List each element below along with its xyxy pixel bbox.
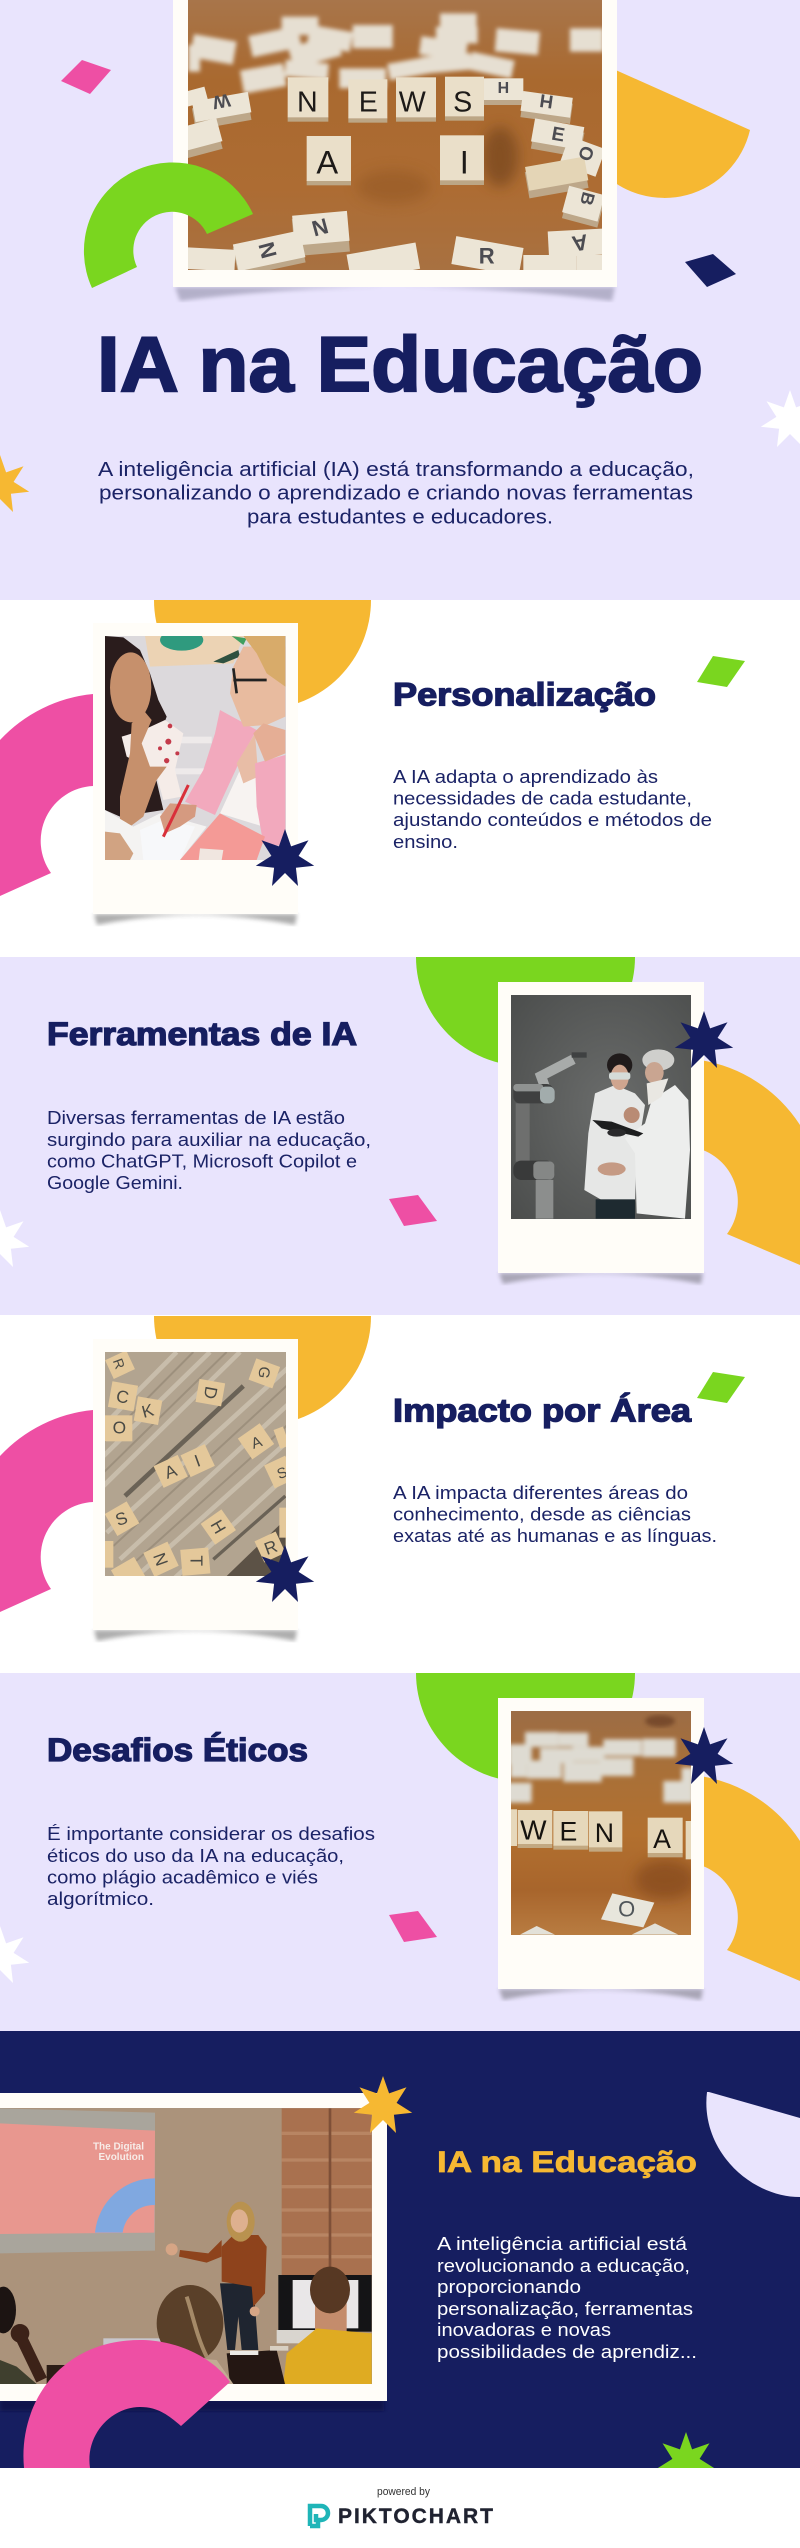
body text: Google Gemini.: [47, 1173, 183, 1193]
photo: scrabble tiles on wood: W: [520, 1814, 547, 1845]
photo: presenter in classroom: [0, 2108, 372, 2384]
photo: scrabble tiles spelling NEWS AI: N: [253, 239, 282, 261]
photo: scrabble tiles spelling NEWS AI: [177, 0, 606, 281]
body text: revolucionando a educação,: [437, 2256, 690, 2276]
body text: A inteligência artificial está: [437, 2234, 688, 2254]
body text: A IA impacta diferentes áreas do: [393, 1483, 688, 1503]
hero frame shadow: [175, 287, 615, 301]
photo: wooden scrabble letters: H: [207, 1516, 230, 1537]
photo frame: [0, 2093, 387, 2401]
body text: [437, 2234, 697, 2362]
icon: navy star: [675, 1011, 733, 1068]
photo: scrabble tiles spelling NEWS AI: A: [316, 143, 338, 180]
photo: presenter in classroom: The Digital: [93, 2141, 144, 2152]
shape: yellow semicircle: [154, 600, 371, 709]
photo frame: [93, 1339, 298, 1630]
shape: pink arc: [23, 2340, 230, 2468]
body text: Diversas ferramentas de IA estão: [47, 1108, 345, 1128]
powered by label: powered by: [377, 2486, 430, 2498]
title: IA na Educação: [97, 320, 703, 408]
photo: scrabble tiles spelling NEWS AI: O: [574, 143, 599, 164]
shape: orange arc: [700, 1776, 800, 1981]
panel: Ferramentas de IA: [0, 957, 800, 1315]
photo: scrabble tiles spelling NEWS AI: W: [399, 87, 426, 119]
body text: ensino.: [393, 832, 458, 852]
photo: scrabble tiles spelling NEWS AI: R: [479, 243, 495, 268]
photo: scrabble tiles on wood: A: [653, 1824, 671, 1854]
footer: [0, 2468, 800, 2548]
photo: scrabble tiles spelling NEWS AI: H: [538, 90, 555, 113]
icon: green star: [658, 2432, 714, 2468]
shape: pink arc: [0, 1410, 93, 1612]
intro text: A inteligência artificial (IA) está transformando a educação,: [98, 459, 694, 481]
body text: É importante considerar os desafios: [47, 1824, 375, 1844]
photo: scrabble tiles spelling NEWS AI: E: [359, 87, 378, 119]
shape: green semicircle: [416, 957, 635, 1066]
panel: Impacto por Área: [0, 1316, 745, 1642]
frame shadow: [94, 914, 297, 925]
icon: navy star: [256, 1545, 314, 1602]
body text: [393, 1483, 717, 1546]
icon: navy star: [675, 1727, 733, 1784]
shape: yellow half circle: [600, 63, 750, 198]
shape: green diamond: [697, 656, 745, 687]
body text: personalização, ferramentas: [437, 2299, 693, 2319]
body text: inovadoras e novas: [437, 2320, 611, 2340]
photo: wooden scrabble letters: N: [149, 1550, 172, 1569]
photo: scrabble tiles spelling NEWS AI: I: [460, 143, 469, 180]
photo: scrabble tiles spelling NEWS AI: E: [550, 124, 566, 147]
photo: wooden scrabble letters: O: [113, 1417, 126, 1437]
panel: Personalização: [0, 600, 745, 926]
photo: wooden scrabble letters: A: [249, 1433, 265, 1453]
photo frame: [498, 982, 704, 1273]
body text: [393, 767, 712, 852]
body text: [47, 1108, 371, 1193]
shape: pink diamond: [61, 60, 111, 94]
frame shadow: [94, 1630, 297, 1641]
photo: student and teacher: [105, 629, 286, 860]
icon: navy star: [256, 829, 314, 886]
photo: presenter in classroom: Evolution: [99, 2152, 144, 2163]
shape: orange arc: [700, 1060, 800, 1265]
intro text: para estudantes e educadores.: [247, 506, 553, 528]
photo: wooden scrabble letters: S: [275, 1465, 290, 1483]
photo: wooden scrabble letters: S: [112, 1507, 130, 1530]
frame shadow: [499, 1989, 703, 2000]
photo: scrabble tiles on wood: [505, 1711, 695, 1935]
icon: white star: [0, 1926, 29, 1983]
body text: exatas até as humanas e as línguas.: [393, 1526, 717, 1546]
heading: Ferramentas de IA: [47, 1016, 357, 1052]
photo: scrabble tiles spelling NEWS AI: H: [498, 78, 509, 95]
body text: A IA adapta o aprendizado às: [393, 767, 658, 787]
shape: yellow semicircle: [154, 1316, 371, 1425]
icon: white star: [0, 1210, 29, 1267]
body text: [47, 1824, 375, 1909]
panel: Desafios Éticos: [0, 1673, 800, 2031]
photo: wooden scrabble letters: D: [200, 1385, 222, 1401]
photo: scrabble tiles on wood: N: [595, 1818, 614, 1848]
frame shadow: [499, 1273, 703, 1284]
shape: green arc: [84, 162, 253, 288]
body text: como plágio acadêmico e viés: [47, 1868, 318, 1888]
photo frame: [93, 623, 298, 914]
heading: IA na Educação: [437, 2146, 697, 2179]
photo: wooden scrabble letters: R: [110, 1356, 128, 1371]
photo: scientists with robot arm: [511, 995, 691, 1219]
icon: yellow star: [354, 2076, 412, 2133]
photo: scrabble tiles spelling NEWS AI: N: [297, 87, 318, 119]
body text: necessidades de cada estudante,: [393, 788, 692, 808]
photo: wooden scrabble letters: T: [187, 1555, 207, 1566]
icon: piktochart logo: [310, 2506, 328, 2526]
intro text: personalizando o aprendizado e criando novas ferramentas: [99, 482, 693, 504]
hero photo frame: [173, 0, 617, 287]
body text: algorítmico.: [47, 1889, 154, 1909]
photo: wooden scrabble letters: I: [192, 1450, 203, 1471]
photo: scrabble tiles spelling NEWS AI: N: [309, 213, 331, 241]
photo: scrabble tiles spelling NEWS AI: A: [570, 229, 590, 257]
photo: scrabble tiles spelling NEWS AI: B: [576, 190, 599, 208]
body text: éticos do uso da IA na educação,: [47, 1846, 344, 1866]
shape: green semicircle: [416, 1673, 635, 1782]
heading: Impacto por Área: [393, 1392, 691, 1428]
shape: pink arc: [0, 694, 93, 896]
body text: surgindo para auxiliar na educação,: [47, 1130, 371, 1150]
shape: pink diamond: [389, 1195, 437, 1226]
photo: wooden scrabble letters: C: [115, 1386, 130, 1408]
intro text: [98, 459, 694, 528]
photo: wooden scrabble letters: [105, 1352, 286, 1576]
body text: proporcionando: [437, 2277, 581, 2297]
shape: pink diamond: [389, 1911, 437, 1942]
photo: scrabble tiles on wood: O: [618, 1897, 635, 1922]
panel: conclusion: [0, 2031, 800, 2489]
heading: Desafios Éticos: [47, 1732, 308, 1768]
frame shadow: [0, 2399, 384, 2411]
photo: scrabble tiles spelling NEWS AI: W: [211, 90, 232, 113]
shape: lavender half circle: [706, 2092, 800, 2197]
body text: possibilidades de aprendiz...: [437, 2342, 697, 2362]
body text: ajustando conteúdos e métodos de: [393, 810, 712, 830]
photo frame: [498, 1698, 704, 1989]
photo: scrabble tiles on wood: E: [559, 1817, 577, 1847]
body text: conhecimento, desde as ciências: [393, 1504, 691, 1524]
photo: wooden scrabble letters: A: [162, 1460, 180, 1483]
shape: green diamond: [697, 1372, 745, 1403]
photo: wooden scrabble letters: G: [254, 1365, 273, 1380]
photo: scrabble tiles spelling NEWS AI: S: [453, 87, 472, 119]
body text: como ChatGPT, Microsoft Copilot e: [47, 1152, 357, 1172]
piktochart wordmark: PIKTOCHART: [338, 2505, 493, 2528]
icon: white star: [761, 390, 800, 447]
shape: navy diamond: [685, 254, 736, 287]
panel: hero: [0, 0, 800, 600]
photo: wooden scrabble letters: R: [261, 1536, 280, 1559]
icon: yellow star: [0, 455, 29, 512]
heading: Personalização: [393, 676, 656, 712]
photo: wooden scrabble letters: K: [139, 1399, 156, 1422]
